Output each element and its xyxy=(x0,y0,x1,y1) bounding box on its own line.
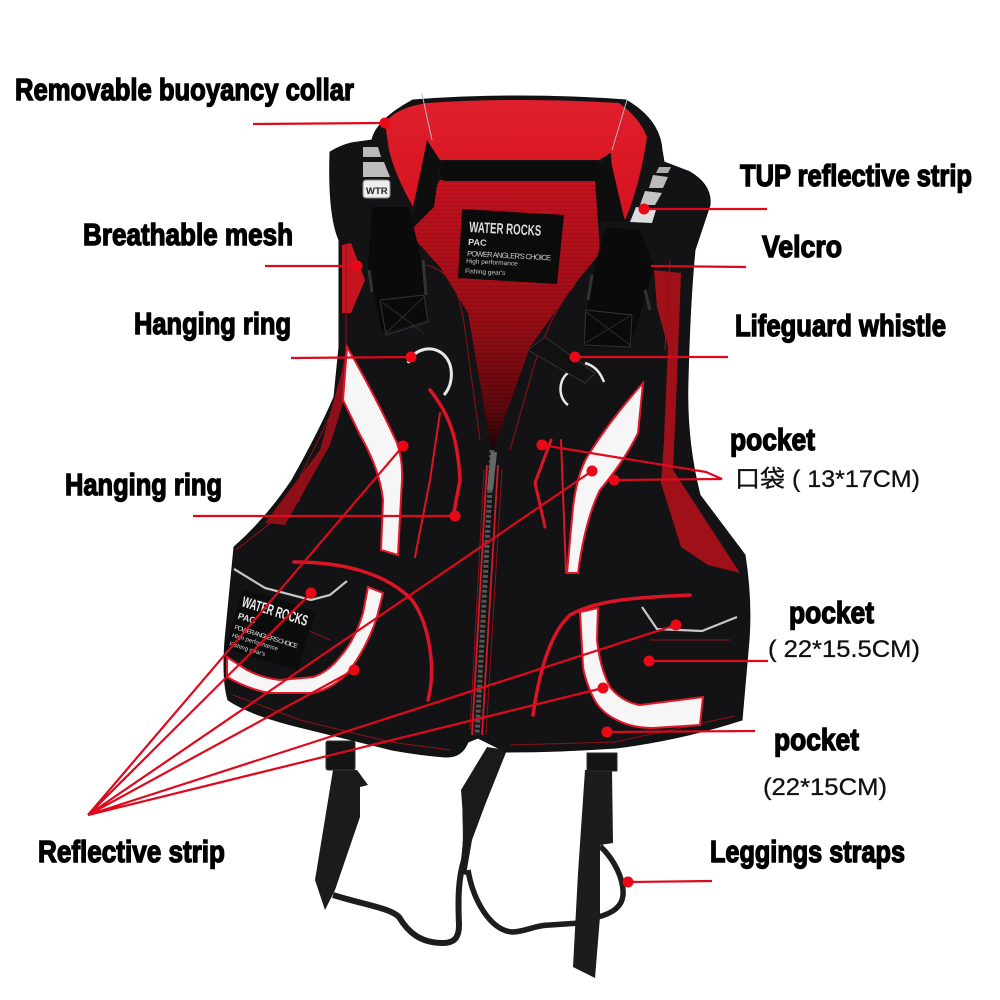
callout: hanging ring upper: Hanging ring xyxy=(134,306,291,341)
callout: leggings straps: Leggings straps xyxy=(710,834,905,869)
leg strap: right xyxy=(573,753,617,978)
neck label: High performance xyxy=(466,258,518,268)
pocket label xyxy=(225,589,316,670)
pocket label: High performance xyxy=(231,633,279,653)
webbing straps xyxy=(368,207,654,347)
callout: velcro: Velcro xyxy=(762,229,842,264)
side mesh: left upper xyxy=(342,243,365,313)
callout: lower pocket size: pocket xyxy=(774,722,859,757)
leg strap: thin looping webbing xyxy=(333,800,466,943)
pocket label: POWER ANGLER'S CHOICE xyxy=(233,624,299,650)
callout: middle pocket size: ( 22*15.5CM) xyxy=(768,636,920,663)
whistle buckle and ring xyxy=(528,337,604,405)
centre mesh lining xyxy=(409,180,600,453)
callout: lifeguard whistle: Lifeguard whistle xyxy=(735,308,946,343)
callout: chest pocket size: 口袋 ( 13*17CM) xyxy=(735,466,920,493)
side mesh: right xyxy=(654,270,740,573)
reflective strip: right upper xyxy=(567,383,643,573)
reflective strip: right lower xyxy=(580,608,703,728)
illustration: life vest xyxy=(224,94,750,978)
shoulder tabs: right xyxy=(630,167,671,223)
leg strap: centre xyxy=(460,747,507,875)
leg strap: left xyxy=(315,741,368,910)
red pocket trims xyxy=(294,390,690,715)
neck label xyxy=(458,209,564,284)
reflective strip: left lower xyxy=(227,587,383,693)
neck label: PAC xyxy=(468,237,487,248)
leg strap: lower loop xyxy=(468,846,623,932)
callout: reflective strip fan of lines xyxy=(38,440,682,869)
reflective strip: left upper xyxy=(343,347,402,555)
callout: leggings straps xyxy=(622,834,905,888)
callout: hanging ring upper xyxy=(134,306,416,362)
callout: lifeguard whistle xyxy=(570,308,946,362)
callout: hanging ring lower: Hanging ring xyxy=(65,467,222,502)
red stitching xyxy=(233,245,735,750)
callout: removable buoyancy collar: Removable buoyancy collar xyxy=(15,72,354,107)
neck label: Fishing gear's xyxy=(465,268,506,277)
callout: chest pocket size: pocket xyxy=(730,422,815,457)
callout: removable buoyancy collar xyxy=(15,72,390,128)
collar xyxy=(385,94,647,232)
hanging ring hook xyxy=(408,349,451,395)
centre zipper xyxy=(472,450,498,735)
neck label: POWER ANGLER'S CHOICE xyxy=(467,249,551,262)
callout: reflective strip fan of lines: Reflective strip xyxy=(38,834,225,869)
pocket reflective piping xyxy=(234,569,737,631)
side mesh: left lower xyxy=(265,360,345,525)
callout: TUP reflective strip xyxy=(638,158,972,214)
vest body xyxy=(224,96,750,757)
callout: breathable mesh xyxy=(83,217,362,272)
callout: lower pocket size xyxy=(602,722,887,801)
callout: middle pocket size: pocket xyxy=(789,595,874,630)
callout: lower pocket size: (22*15CM) xyxy=(763,774,887,801)
callout: chest pocket size xyxy=(536,422,920,493)
shoulder tabs: left: WTR xyxy=(366,186,388,197)
pocket label: PAC xyxy=(237,611,258,626)
callout: hanging ring lower xyxy=(65,467,460,522)
pocket label: Fishing gear's xyxy=(228,641,266,658)
neck label: WATER ROCKS xyxy=(469,219,542,240)
pocket label: WATER ROCKS xyxy=(240,594,310,630)
callout: breathable mesh: Breathable mesh xyxy=(83,217,293,252)
callout: middle pocket size xyxy=(644,595,920,666)
shoulder tabs: left xyxy=(363,147,390,198)
